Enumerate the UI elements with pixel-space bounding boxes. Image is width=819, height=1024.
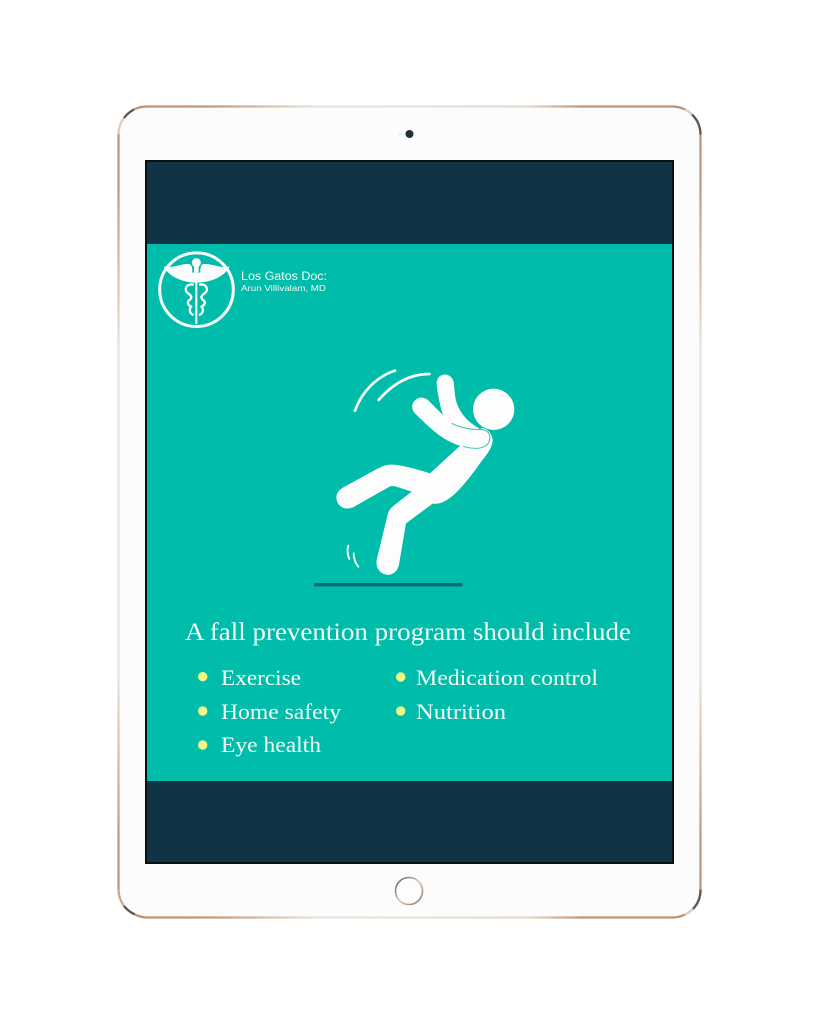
raised arm, front [412, 398, 490, 449]
list column two [396, 665, 598, 724]
teal content panel [147, 244, 672, 781]
list column one [198, 665, 341, 757]
body and legs [336, 428, 493, 575]
tablet frame edge [118, 106, 701, 918]
arm outline near shoulder [452, 423, 490, 448]
icon: falling person [336, 371, 514, 575]
logo: caduceus emblem [160, 253, 233, 326]
ground line [314, 583, 462, 586]
item: medication control: Medication control [416, 665, 598, 690]
logo text: Los Gatos Doc: [241, 271, 327, 283]
motion arcs above [355, 371, 429, 411]
home button [396, 878, 422, 904]
camera [398, 130, 414, 138]
item: nutrition: Nutrition [416, 699, 506, 724]
screen [145, 160, 674, 864]
head [473, 389, 514, 430]
logo text: Arun Villivalam, MD [241, 283, 326, 293]
item: exercise: Exercise [221, 665, 301, 690]
heading: A fall prevention program should include [185, 619, 631, 646]
item: home safety: Home safety [221, 699, 341, 724]
raised arm, back [437, 374, 481, 429]
item: eye health: Eye health [221, 732, 321, 757]
logo text [241, 271, 327, 293]
motion marks near foot [348, 546, 358, 567]
tablet body [118, 106, 701, 918]
